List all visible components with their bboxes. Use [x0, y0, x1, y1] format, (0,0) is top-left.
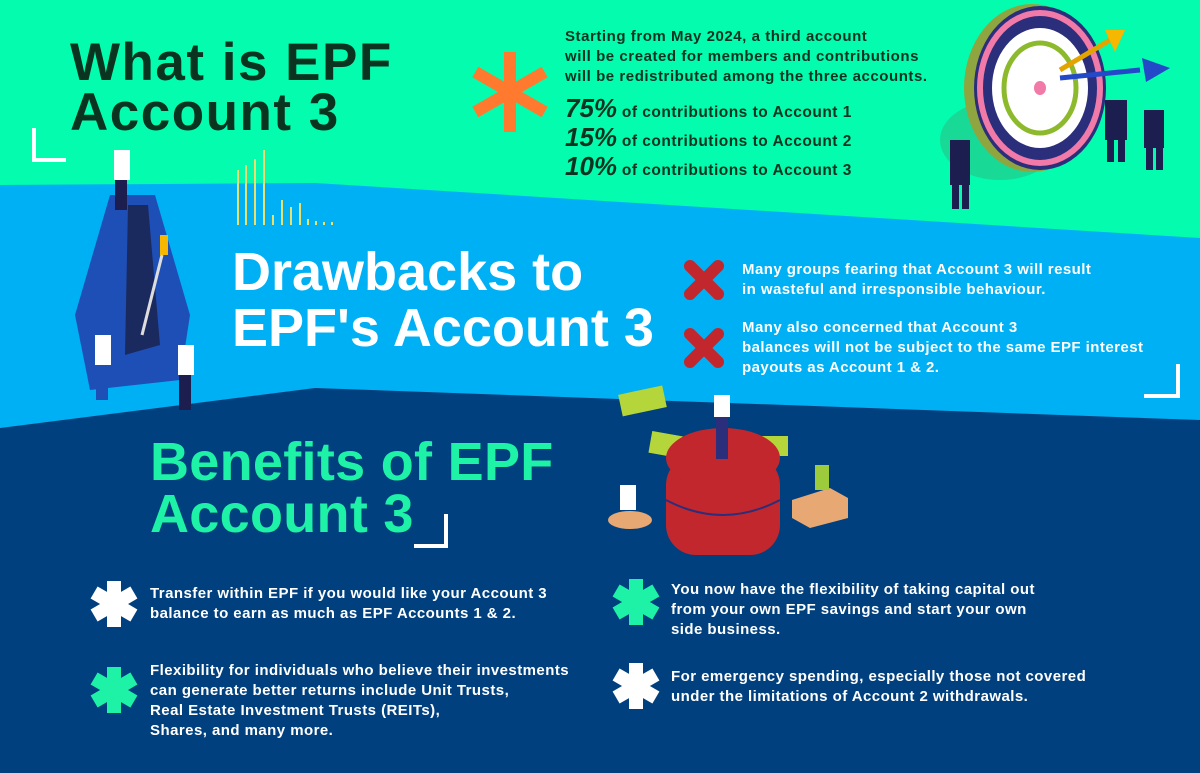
corner bracket right [1144, 364, 1180, 398]
text: Real Estate Investment Trusts (REITs), [150, 702, 440, 719]
drawback 1 [684, 260, 1091, 300]
corner bracket benefits [414, 514, 448, 548]
text: intro: will be created for members and contributions [565, 48, 919, 65]
text: contribution percentages: 10% of contributions to Account 3 [565, 151, 852, 181]
text: balance to earn as much as EPF Accounts 1 & 2. [150, 605, 516, 622]
text: For emergency spending, especially those not covered [671, 668, 1086, 685]
heading: Drawbacks: Drawbacks to [232, 242, 583, 302]
text [742, 261, 1091, 298]
text: in wasteful and irresponsible behaviour. [742, 281, 1046, 298]
text: Many groups fearing that Account 3 will result [742, 261, 1091, 278]
illustration: metronome chart with people [75, 150, 333, 410]
text: from your own EPF savings and start your own [671, 601, 1027, 618]
benefit 3 [612, 579, 1035, 638]
text [671, 581, 1035, 638]
corner bracket top-left [32, 128, 66, 162]
text: Transfer within EPF if you would like your Account 3 [150, 585, 547, 602]
text: intro: Starting from May 2024, a third account [565, 28, 867, 45]
heading: Benefits: Benefits of EPF [150, 432, 554, 492]
text: Shares, and many more. [150, 722, 333, 739]
heading: Benefits: Account 3 [150, 484, 414, 544]
benefit 2 [90, 662, 569, 739]
text: side business. [671, 621, 781, 638]
title: What is EPF Account 3: What is EPF [70, 33, 393, 92]
text [150, 662, 569, 739]
icon: green asterisk [90, 667, 138, 713]
text: Flexibility for individuals who believe their investments [150, 662, 569, 679]
drawback 2 [684, 319, 1143, 376]
text: can generate better returns include Unit Trusts, [150, 682, 509, 699]
text: balances will not be subject to the same EPF interest [742, 339, 1143, 356]
text: intro [565, 28, 928, 85]
heading: Benefits [150, 432, 554, 544]
illustration: red button with people [608, 386, 848, 555]
illustration: dartboard with people [940, 4, 1170, 209]
text: Many also concerned that Account 3 [742, 319, 1018, 336]
icon: red X [684, 328, 724, 368]
text [671, 668, 1086, 705]
text [150, 585, 547, 622]
text: contribution percentages [565, 93, 852, 181]
benefit 4 [612, 663, 1086, 709]
text [742, 319, 1143, 376]
icon: orange asterisk [472, 52, 548, 132]
text: under the limitations of Account 2 withdrawals. [671, 688, 1028, 705]
text: contribution percentages: 15% of contributions to Account 2 [565, 122, 852, 152]
icon: white asterisk [90, 581, 138, 627]
title: What is EPF Account 3: Account 3 [70, 83, 340, 142]
heading: Drawbacks: EPF's Account 3 [232, 298, 654, 358]
icon: white asterisk [612, 663, 660, 709]
text: You now have the flexibility of taking capital out [671, 581, 1035, 598]
icon: green asterisk [612, 579, 660, 625]
benefit 1 [90, 581, 547, 627]
text: payouts as Account 1 & 2. [742, 359, 939, 376]
text: contribution percentages: 75% of contributions to Account 1 [565, 93, 852, 123]
text: intro: will be redistributed among the three accounts. [565, 68, 928, 85]
title: What is EPF Account 3 [70, 33, 393, 142]
icon: red X [684, 260, 724, 300]
heading: Drawbacks [232, 242, 654, 358]
